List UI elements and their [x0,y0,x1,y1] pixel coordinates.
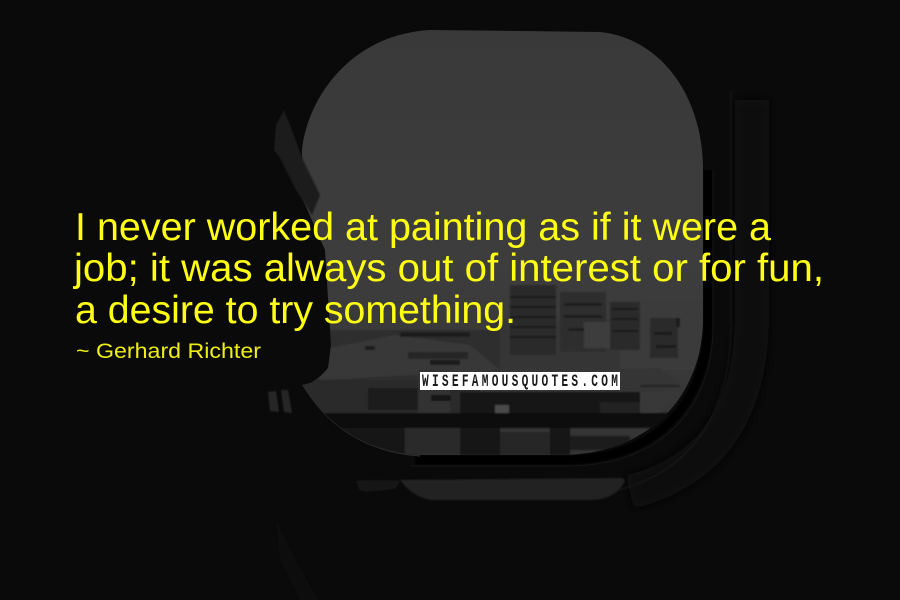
quote text: I never worked at painting as if it were a [75,206,771,249]
sky [290,25,710,460]
attribution: ~ Gerhard Richter [76,339,261,363]
watermark badge: WISEFAMOUSQUOTES.COM [422,373,618,392]
airplane window frame [300,90,752,492]
quote text: a desire to try something. [75,289,516,332]
midground buildings [300,330,680,415]
sill left shadow piece [356,480,400,491]
window sill [400,478,625,500]
hair highlight at temple [274,110,320,215]
tower block [510,285,640,355]
silhouette of head [0,0,340,600]
seat strap highlight [268,390,292,413]
quote text: job; it was always out of interest or for fun, [73,247,824,290]
window view: sky and city [290,25,710,460]
distant skyline [650,318,702,370]
dark foreground rooftops [324,392,668,428]
seat shadow stripes [276,520,318,600]
quote text [73,206,824,332]
quote poster [73,30,820,500]
road and lower strip [320,428,630,455]
